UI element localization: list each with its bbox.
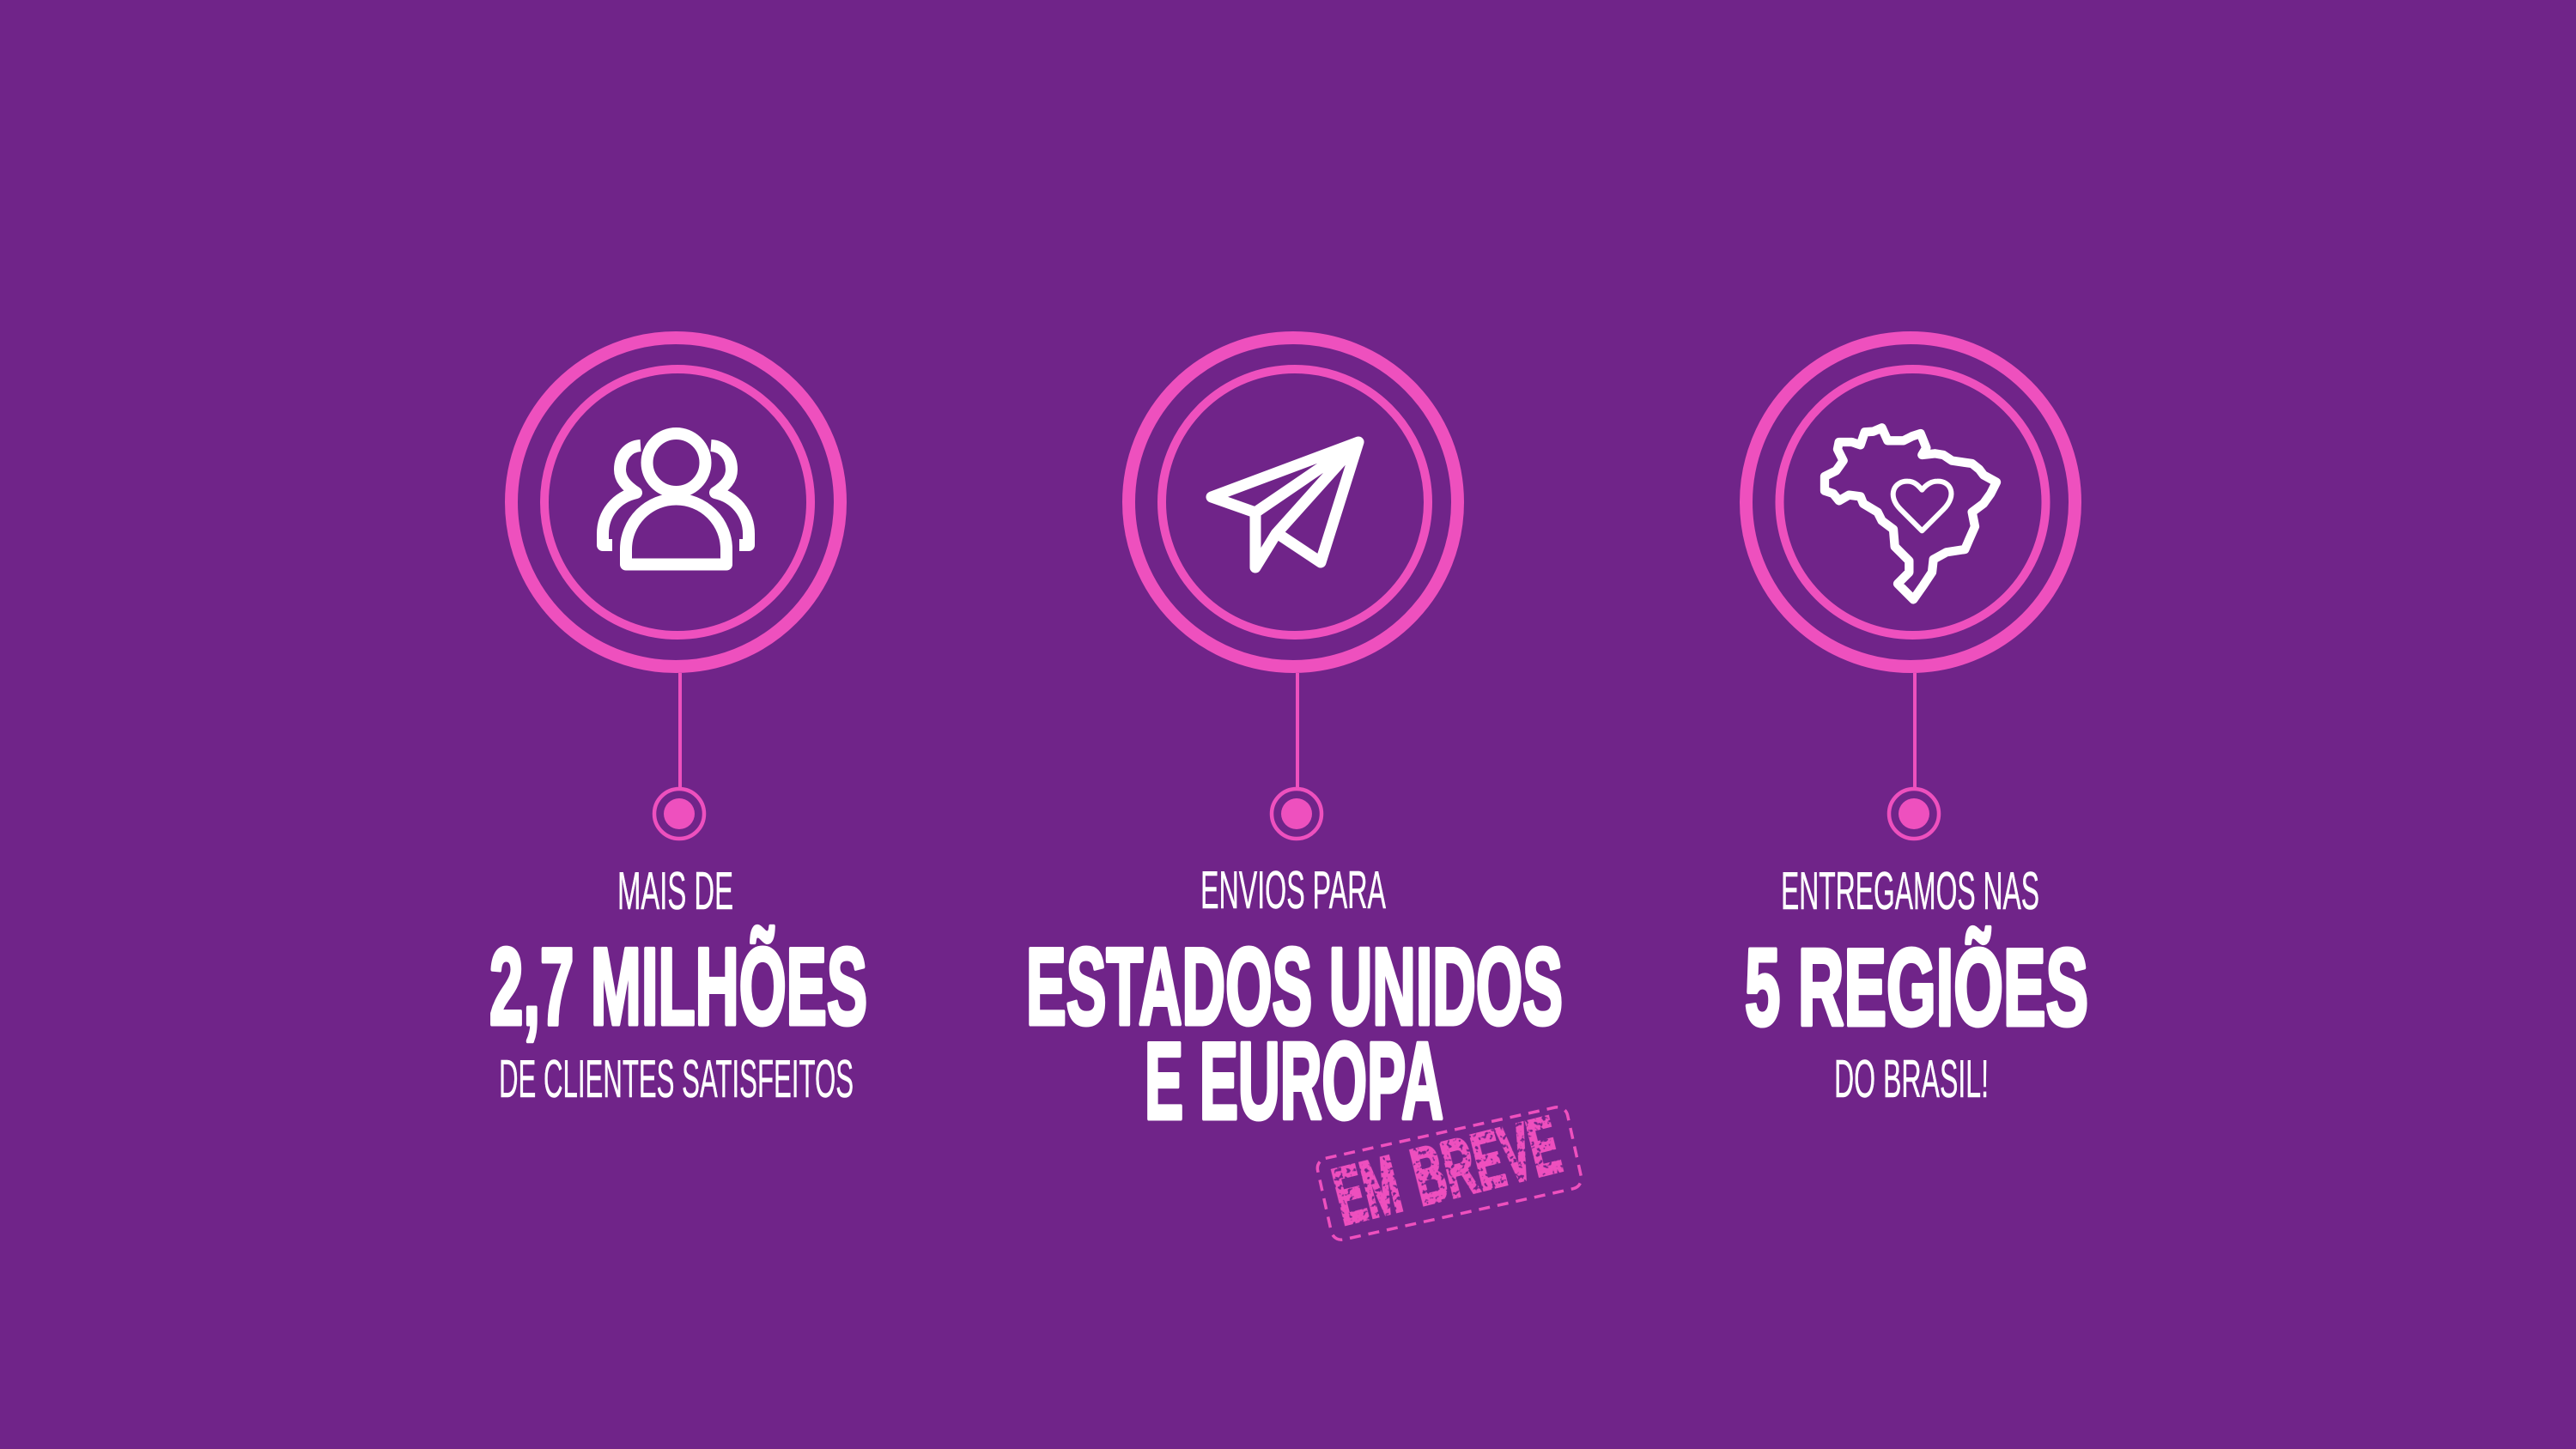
heading: estados unidos: ESTADOS UNIDOS (1026, 925, 1563, 1047)
node dot (1272, 789, 1321, 839)
panel: clientes (489, 338, 867, 1109)
inner ring (1779, 369, 2045, 635)
heading: e europa: E EUROPA (1145, 1020, 1443, 1142)
outer ring (1747, 338, 2075, 666)
heading: 2,7 milhões: 2,7 MILHÕES (489, 925, 867, 1047)
text: mais de: MAIS DE (617, 862, 733, 921)
inner ring (1162, 369, 1428, 635)
icon: paper plane (1212, 442, 1358, 567)
node dot (654, 789, 704, 839)
connector line (1913, 673, 1917, 788)
connector line (1296, 673, 1299, 788)
inner ring (544, 369, 811, 635)
outer ring (512, 338, 840, 666)
outer ring (1128, 338, 1458, 666)
text: envios para: ENVIOS PARA (1200, 861, 1386, 920)
text: de clientes satisfeitos: DE CLIENTES SATISFEITOS (499, 1050, 854, 1109)
panel: regiões (1745, 338, 2088, 1109)
stamp text: EM BREVE (1325, 1099, 1568, 1241)
node dot (1889, 789, 1939, 839)
connector line (678, 673, 682, 788)
text: entregamos nas: ENTREGAMOS NAS (1781, 862, 2039, 921)
icon: people (603, 433, 749, 565)
stamp: em breve (1315, 1099, 1583, 1242)
icon: brazil map with heart (1825, 427, 1996, 599)
stamp border (1315, 1105, 1583, 1242)
heading: 5 regiões: 5 REGIÕES (1745, 926, 2088, 1048)
panel: envios (1026, 338, 1583, 1242)
text: do brasil: DO BRASIL! (1834, 1050, 1989, 1109)
